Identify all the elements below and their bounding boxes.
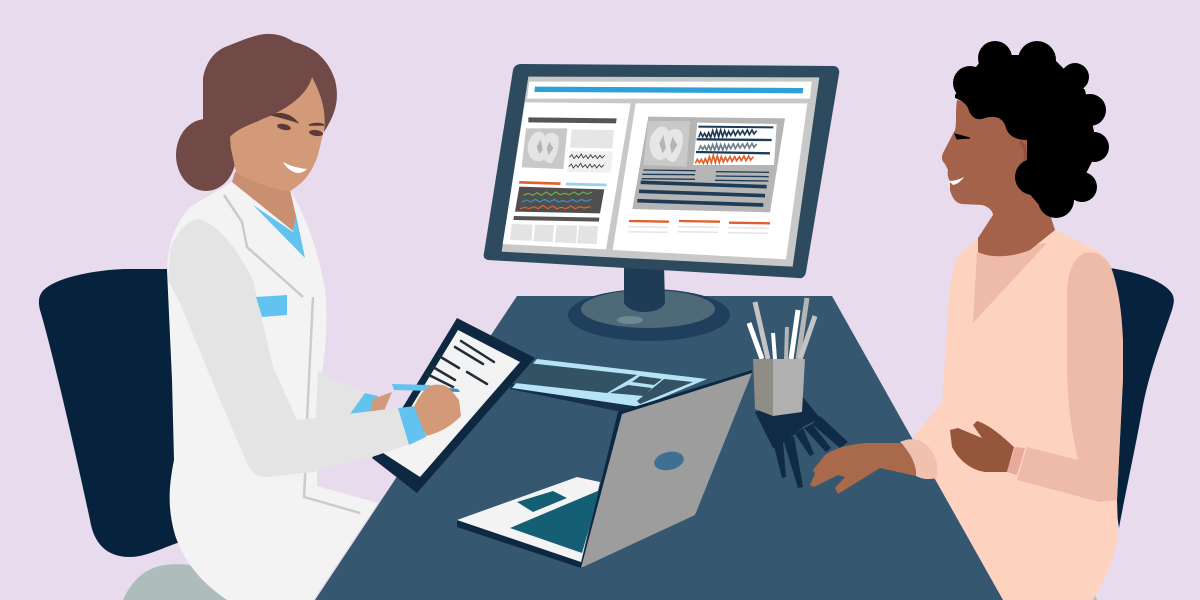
chair: patient backrest bbox=[1100, 268, 1174, 528]
eye bbox=[955, 134, 970, 139]
monitor frame bbox=[484, 64, 839, 278]
laptop bbox=[457, 370, 752, 568]
clipboard paper bbox=[383, 330, 520, 477]
patient far hand bbox=[950, 421, 1014, 472]
coat lapel bbox=[224, 195, 303, 297]
face bbox=[942, 100, 1050, 215]
patient neck bbox=[978, 205, 1055, 256]
stand highlight bbox=[617, 316, 643, 324]
laptop lid bbox=[581, 373, 752, 568]
right panel bbox=[613, 103, 807, 259]
patient head bbox=[942, 41, 1109, 218]
stool: doctor seat bbox=[123, 564, 235, 600]
patient collar bbox=[973, 243, 1047, 323]
brain scan large bbox=[643, 121, 690, 167]
stand inner disc bbox=[581, 290, 715, 328]
doctor near sleeve bbox=[168, 219, 410, 477]
doctor writing hand bbox=[414, 385, 461, 436]
left panel bbox=[503, 102, 631, 249]
header strip bbox=[527, 82, 812, 99]
laptop base bbox=[457, 477, 600, 562]
doctor near cuff bbox=[398, 406, 426, 445]
pen bbox=[392, 384, 460, 392]
patient left cuff bbox=[900, 439, 937, 479]
clipboard text lines bbox=[427, 341, 494, 387]
monitor screen contents bbox=[502, 77, 819, 267]
coat zip seam bbox=[304, 297, 360, 513]
monitor bbox=[484, 64, 839, 341]
keyboard bbox=[510, 359, 707, 412]
doctor scrub collar bbox=[253, 205, 305, 258]
stool: patient seat bbox=[1080, 592, 1097, 600]
clipboard bbox=[372, 318, 535, 493]
laptop base shadow edge bbox=[457, 520, 581, 568]
eyes bbox=[277, 123, 323, 137]
patient sleeve bbox=[1017, 252, 1123, 502]
hair bbox=[203, 34, 337, 165]
hair bun bbox=[176, 119, 236, 191]
laptop lid edge bbox=[580, 370, 752, 568]
EEG dark chart bbox=[515, 187, 604, 213]
patient torso bbox=[913, 230, 1123, 600]
laptop logo bbox=[652, 449, 686, 473]
eyebrows bbox=[272, 114, 324, 125]
ear detail bbox=[1020, 142, 1026, 166]
doctor far wrist bbox=[370, 392, 392, 412]
stand neck bbox=[624, 265, 665, 312]
doctor badge bbox=[256, 295, 287, 317]
patient far cuff bbox=[1007, 447, 1025, 475]
header blue bar bbox=[534, 87, 803, 93]
afro curly hair bbox=[953, 41, 1109, 218]
laptop keyboard area bbox=[510, 490, 600, 553]
doctor far sleeve bbox=[315, 371, 372, 430]
pencil cup bbox=[753, 359, 805, 416]
monitor stand base bbox=[568, 289, 730, 341]
desk bbox=[315, 296, 1003, 600]
pencils bbox=[749, 298, 815, 359]
smile bbox=[283, 162, 307, 173]
face bbox=[228, 75, 326, 191]
doctor far cuff bbox=[350, 393, 378, 414]
doctor neck bbox=[232, 172, 296, 231]
patient left hand on desk bbox=[810, 443, 916, 494]
doctor coat body bbox=[167, 182, 378, 600]
trackpad bbox=[517, 491, 567, 512]
smile bbox=[949, 177, 964, 185]
doctor head bbox=[176, 34, 337, 191]
chair: doctor backrest bbox=[39, 269, 180, 557]
pencil cup shadow bbox=[755, 396, 848, 488]
brain scan small bbox=[522, 128, 567, 169]
